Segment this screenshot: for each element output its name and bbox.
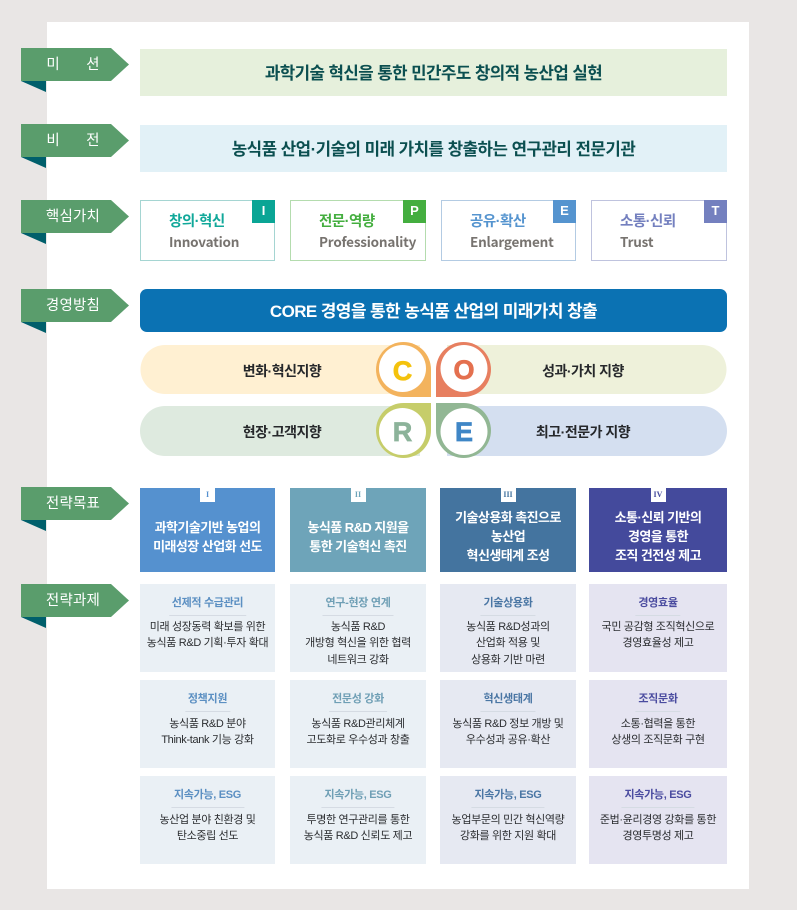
badge R xyxy=(376,403,431,458)
label: 전략과제: 전략과제 xyxy=(46,593,100,609)
badge C: C xyxy=(393,356,412,386)
badge R: R xyxy=(393,417,412,447)
strategic goal I: 미래성장 산업화 선도 xyxy=(153,539,262,554)
task: 지속가능 ESG 2: 지속가능, ESG xyxy=(324,789,392,801)
core value: professionality xyxy=(290,200,426,261)
badge C xyxy=(376,342,431,397)
mission statement: 과학기술 혁신을 통한 민간주도 창의적 농산업 실현 xyxy=(265,64,602,83)
vision statement xyxy=(140,125,727,172)
task: 연구-현장 연계: 연구-현장 연계 xyxy=(325,597,391,609)
task: 선제적 수급관리: 선제적 수급관리 xyxy=(172,597,243,609)
task: 정책지원: 정책지원 xyxy=(188,693,227,705)
task: 혁신생태계: 농식품 R&D 정보 개방 및 xyxy=(452,718,564,730)
strategic goal II xyxy=(290,488,426,572)
task: 경영효율: 경영효율 xyxy=(638,597,678,609)
task: 지속가능 ESG 3: 지속가능, ESG xyxy=(474,789,542,801)
task: 지속가능 ESG 4: 준법·윤리경영 강화를 통한 xyxy=(600,814,716,826)
task: 선제적 수급관리: 농식품 R&D 기획·투자 확대 xyxy=(147,637,268,649)
task: 경영효율 xyxy=(589,584,727,672)
pill: best expert xyxy=(447,406,727,456)
pill: field and customer xyxy=(140,406,420,456)
strategic goal IV: IV xyxy=(654,490,662,499)
strategic goal II: II xyxy=(355,490,361,499)
task: 연구-현장 연계: 농식품 R&D xyxy=(331,621,385,633)
strategic goal III: 농산업 xyxy=(491,529,525,544)
task: 혁신생태계 xyxy=(440,680,576,768)
core value: innovation: 창의·혁신 xyxy=(169,214,225,230)
label: 경영방침: 경영방침 xyxy=(46,298,100,314)
strategic goal II: 통한 기술혁신 촉진 xyxy=(309,539,407,554)
strategic goal III: III xyxy=(503,490,513,499)
strategic goal I: I xyxy=(206,490,209,499)
task: 연구-현장 연계 xyxy=(290,584,426,672)
label: 전략목표: 전략목표 xyxy=(46,496,100,512)
management policy banner xyxy=(140,289,727,332)
pill: performance and value xyxy=(447,345,726,394)
task: 지속가능 ESG 1: 지속가능, ESG xyxy=(174,789,241,801)
pill text: 성과·가치 지향: 성과·가치 지향 xyxy=(542,363,624,379)
task: 지속가능 ESG 3 xyxy=(440,776,576,864)
core value: trust: 소통·신뢰 xyxy=(620,214,676,230)
task: 기술상용화 xyxy=(440,584,576,672)
core value: innovation xyxy=(140,200,275,261)
label: 비전: 비 전 xyxy=(46,133,100,149)
strategic goal IV: 경영을 통한 xyxy=(628,529,688,544)
core value: trust: T xyxy=(712,203,719,218)
core value: professionality: 전문·역량 xyxy=(319,214,375,230)
label: 미션 xyxy=(21,48,129,92)
strategic goal IV xyxy=(589,488,727,572)
core value: innovation: Innovation xyxy=(169,231,239,251)
task: 기술상용화: 산업화 적용 및 xyxy=(476,637,540,649)
task: 연구-현장 연계: 네트워크 강화 xyxy=(327,654,389,666)
task: 전문성 강화: 농식품 R&D관리체계 xyxy=(311,718,405,730)
task: 선제적 수급관리 xyxy=(140,584,275,672)
strategic goal II: 농식품 R&D 지원을 xyxy=(307,520,409,535)
core value: enlargement: E xyxy=(560,203,569,218)
task: 혁신생태계: 우수성과 공유·확산 xyxy=(466,734,550,746)
task: 전문성 강화: 전문성 강화 xyxy=(332,693,384,705)
label: 핵심가치 xyxy=(21,200,129,244)
task: 지속가능 ESG 2: 농식품 R&D 신뢰도 제고 xyxy=(304,830,412,842)
label: 전략과제 xyxy=(21,584,129,628)
core value: enlargement: 공유·확산 xyxy=(470,214,526,230)
task: 기술상용화: 농식품 R&D성과의 xyxy=(466,621,550,633)
label: 전략목표 xyxy=(21,487,129,531)
task: 지속가능 ESG 3: 강화를 위한 지원 확대 xyxy=(460,830,556,842)
badge E: E xyxy=(455,417,473,447)
task: 지속가능 ESG 1: 농산업 분야 친환경 및 xyxy=(159,814,256,826)
task: 정책지원 xyxy=(140,680,275,768)
task: 조직문화: 조직문화 xyxy=(638,693,678,705)
task: 혁신생태계: 혁신생태계 xyxy=(483,693,533,705)
task: 전문성 강화 xyxy=(290,680,426,768)
management policy banner: CORE 경영을 통한 농식품 산업의 미래가치 창출 xyxy=(270,302,597,321)
task: 지속가능 ESG 4: 지속가능, ESG xyxy=(624,789,692,801)
task: 조직문화: 소통·협력을 통한 xyxy=(621,718,695,730)
core value: professionality: P xyxy=(410,203,419,218)
label: 핵심가치: 핵심가치 xyxy=(46,209,100,225)
core value: professionality: Professionality xyxy=(319,231,416,251)
strategic goal III xyxy=(440,488,576,572)
strategic goal IV: 소통·신뢰 기반의 xyxy=(615,510,701,525)
pill text: 현장·고객지향: 현장·고객지향 xyxy=(243,424,321,440)
label: 경영방침 xyxy=(21,289,129,333)
core value: innovation: I xyxy=(262,203,265,218)
strategic goal I xyxy=(140,488,275,572)
strategic goal I: 과학기술기반 농업의 xyxy=(155,520,260,535)
badge E xyxy=(436,403,491,458)
strategic goal III: 기술상용화 촉진으로 xyxy=(455,510,561,525)
pill text: 변화·혁신지향: 변화·혁신지향 xyxy=(243,363,321,379)
task: 전문성 강화: 고도화로 우수성과 창출 xyxy=(306,734,410,746)
mission statement xyxy=(140,49,727,96)
label: 미션: 미 션 xyxy=(46,57,100,73)
core value: enlargement xyxy=(441,200,576,261)
task: 지속가능 ESG 2 xyxy=(290,776,426,864)
task: 정책지원: 농식품 R&D 분야 xyxy=(169,718,246,730)
task: 지속가능 ESG 1: 탄소중립 선도 xyxy=(177,830,238,842)
task: 정책지원: Think-tank 기능 강화 xyxy=(161,734,254,746)
core value: trust xyxy=(591,200,727,261)
pill text: 최고·전문가 지향: 최고·전문가 지향 xyxy=(536,424,630,440)
pill: change and innovation xyxy=(140,345,420,394)
task: 지속가능 ESG 2: 투명한 연구관리를 통한 xyxy=(306,814,410,826)
task: 연구-현장 연계: 개방형 혁신을 위한 협력 xyxy=(305,637,411,649)
task: 지속가능 ESG 4 xyxy=(589,776,727,864)
label: 비전 xyxy=(21,124,129,168)
core value: trust: Trust xyxy=(620,231,653,251)
badge O xyxy=(436,342,491,397)
badge O: O xyxy=(453,355,475,385)
task: 지속가능 ESG 1 xyxy=(140,776,275,864)
core value: enlargement: Enlargement xyxy=(470,231,554,251)
task: 지속가능 ESG 3: 농업부문의 민간 혁신역량 xyxy=(452,814,564,826)
strategic goal IV: 조직 건전성 제고 xyxy=(615,548,701,563)
task: 기술상용화: 기술상용화 xyxy=(483,597,533,609)
task: 조직문화: 상생의 조직문화 구현 xyxy=(611,734,705,746)
task: 조직문화 xyxy=(589,680,727,768)
task: 기술상용화: 상용화 기반 마련 xyxy=(471,654,545,666)
task: 선제적 수급관리: 미래 성장동력 확보를 위한 xyxy=(150,621,265,633)
task: 경영효율: 경영효율성 제고 xyxy=(622,637,694,649)
task: 경영효율: 국민 공감형 조직혁신으로 xyxy=(602,621,714,633)
vision statement: 농식품 산업·기술의 미래 가치를 창출하는 연구관리 전문기관 xyxy=(232,140,635,159)
task: 지속가능 ESG 4: 경영투명성 제고 xyxy=(622,830,694,842)
strategic goal III: 혁신생태계 조성 xyxy=(467,548,549,563)
